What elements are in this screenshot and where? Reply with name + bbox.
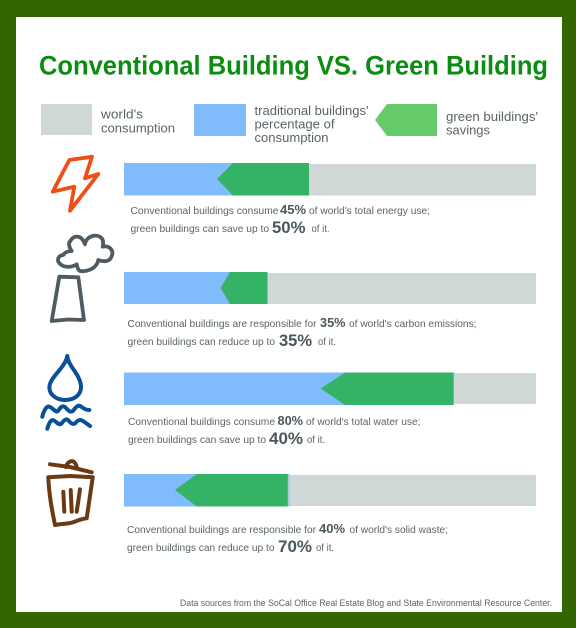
icon: factory smoke bbox=[52, 236, 112, 321]
text: waste: 40% bbox=[319, 521, 345, 536]
text: energy: 50% bbox=[272, 218, 306, 237]
text: waste: Conventional buildings are responsible for bbox=[127, 524, 316, 536]
text: energy bbox=[130, 202, 430, 237]
text: water: green buildings can save up to bbox=[128, 434, 266, 446]
icon: lightning bolt bbox=[53, 157, 98, 211]
title: Conventional Building VS. Green Building bbox=[39, 50, 548, 80]
icon: water drop and waves bbox=[42, 356, 90, 429]
text: carbon: of it. bbox=[318, 336, 336, 348]
text: water: of it. bbox=[307, 434, 325, 446]
bar chart: waste bbox=[124, 474, 536, 506]
bar chart: carbon bbox=[124, 272, 536, 304]
text: energy: Conventional buildings consume bbox=[130, 205, 279, 217]
legend: world's consumption label: consumption bbox=[101, 122, 175, 136]
text: energy: of world's total energy use; bbox=[309, 205, 430, 217]
text: energy: of it. bbox=[312, 223, 330, 235]
text: waste: of it. bbox=[316, 542, 334, 554]
legend: traditional buildings label bbox=[254, 104, 368, 145]
legend: green savings label: green buildings' bbox=[446, 110, 538, 124]
footer: data sources: Data sources from the SoCal Office Real Estate Blog and State Environmental Resource Center. bbox=[180, 598, 552, 608]
icon: trash can bbox=[48, 461, 93, 525]
legend: traditional buildings label: percentage of bbox=[254, 118, 335, 132]
text: waste: 70% bbox=[278, 537, 312, 556]
text: carbon bbox=[128, 315, 476, 350]
legend: green savings label: savings bbox=[446, 124, 490, 138]
legend bbox=[41, 104, 538, 145]
text: waste: green buildings can reduce up to bbox=[127, 542, 275, 554]
text: water: 80% bbox=[278, 413, 303, 428]
text: energy: green buildings can save up to bbox=[130, 223, 269, 235]
legend: green savings label bbox=[446, 110, 538, 138]
text: energy: 45% bbox=[280, 202, 306, 217]
bar chart: water bbox=[124, 372, 536, 405]
bar chart: energy bbox=[124, 163, 536, 196]
legend: traditional buildings label: consumption bbox=[254, 131, 329, 145]
text: water: 40% bbox=[269, 429, 303, 448]
text: carbon: green buildings can reduce up to bbox=[128, 336, 275, 348]
legend: traditional buildings swatch bbox=[194, 104, 246, 136]
text: waste: of world's solid waste; bbox=[350, 524, 448, 536]
text: carbon: of world's carbon emissions; bbox=[349, 318, 476, 330]
text: carbon: 35% bbox=[320, 315, 346, 330]
text: waste bbox=[127, 521, 448, 556]
legend: world's consumption swatch bbox=[41, 104, 92, 135]
legend: world's consumption label: world's bbox=[100, 108, 143, 122]
legend: world's consumption label bbox=[100, 108, 175, 136]
text: water: of world's total water use; bbox=[306, 416, 420, 428]
text: carbon: 35% bbox=[279, 331, 312, 350]
text: carbon: Conventional buildings are responsible for bbox=[128, 318, 317, 330]
legend: green savings arrow bbox=[375, 104, 437, 136]
text: water: Conventional buildings consume bbox=[128, 416, 275, 428]
text: water bbox=[128, 413, 420, 448]
legend: traditional buildings label: traditional buildings' bbox=[254, 104, 368, 118]
